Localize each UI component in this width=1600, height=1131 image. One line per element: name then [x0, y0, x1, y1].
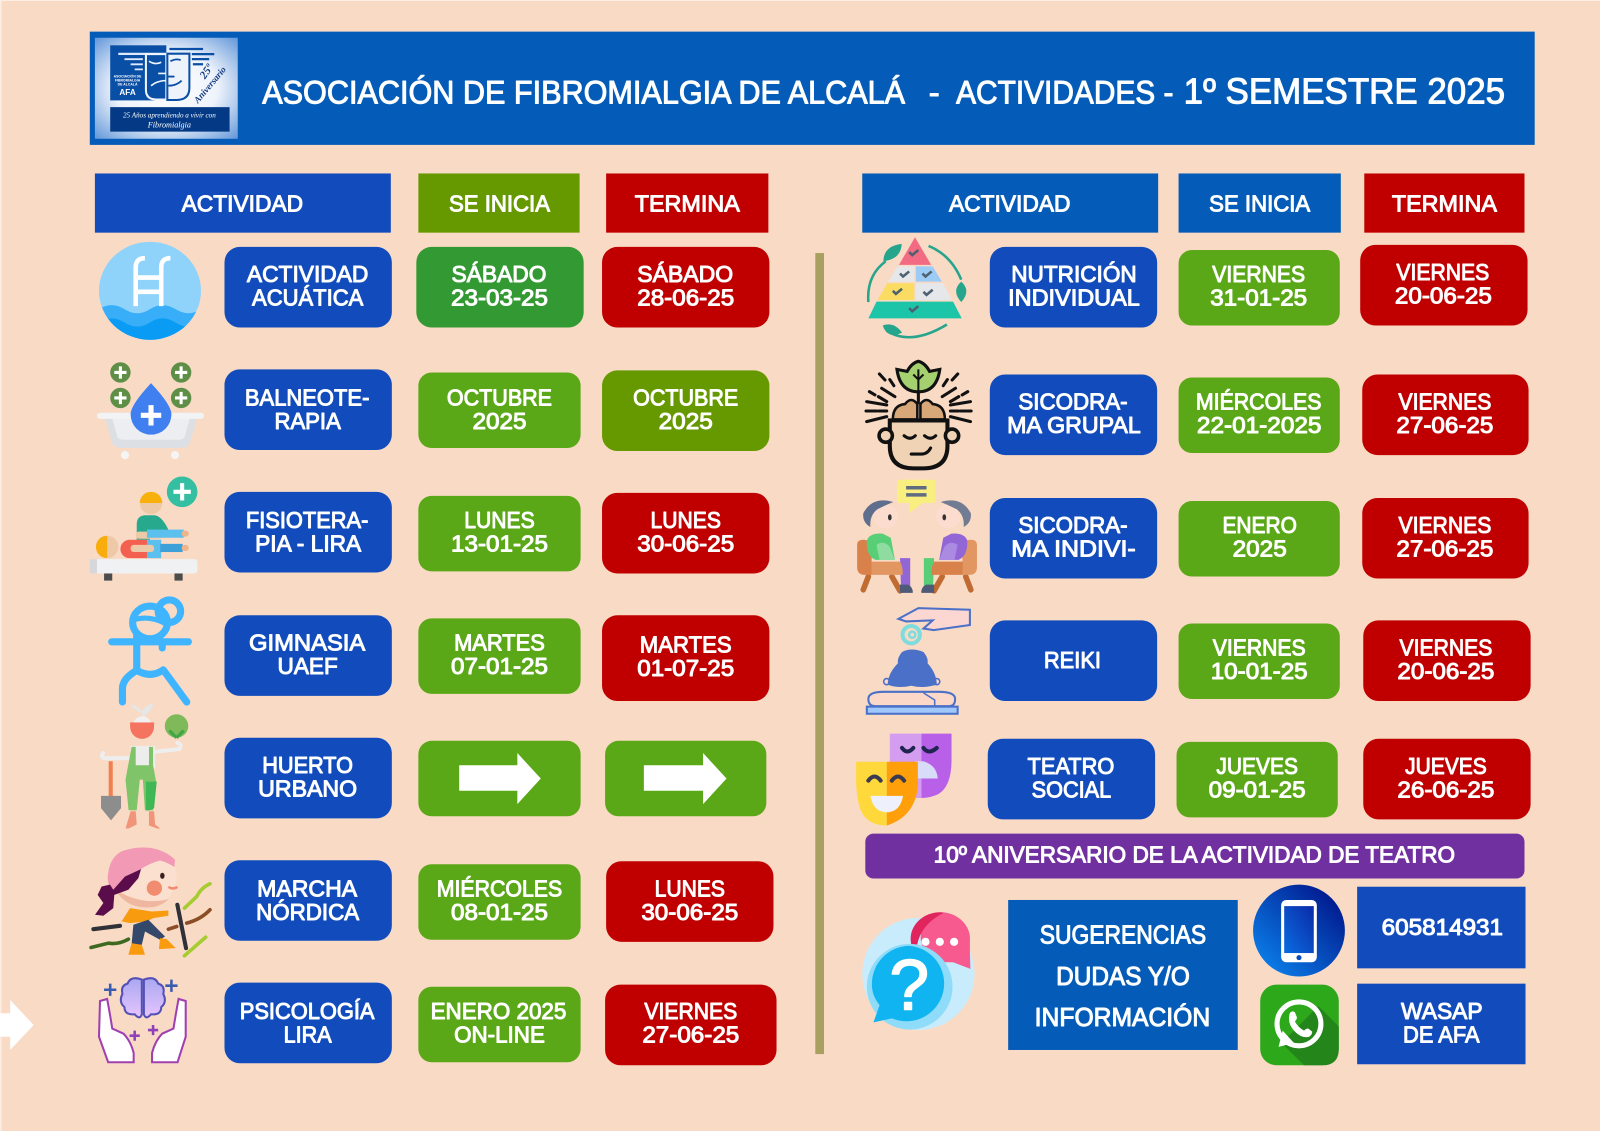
activity: balneoterapia: RAPIA [274, 408, 341, 434]
activity: actividad acuatica [224, 247, 392, 328]
activity: nutricion individual: NUTRICIÓN [1011, 261, 1137, 287]
phone number: 605814931 [1382, 914, 1503, 940]
side arrow [0, 1000, 34, 1050]
phone number [1357, 887, 1526, 968]
start date [418, 864, 581, 940]
activity: teatro social: TEATRO [1028, 753, 1114, 779]
end date: 20-06-25 [1395, 283, 1492, 309]
activity: sicodrama individual [990, 498, 1157, 579]
activity: marcha nordica: NÓRDICA [256, 899, 360, 925]
end date: 27-06-25 [642, 1021, 739, 1047]
end date: VIERNES [1399, 635, 1492, 661]
end date: OCTUBRE [633, 385, 738, 411]
suggestions box: DUDAS Y/O [1056, 963, 1190, 991]
logo: ASOCIACIÓN DE [114, 74, 142, 79]
end date [1362, 374, 1529, 455]
activity: fisioterapia: FISIOTERA- [246, 507, 368, 533]
logo: Aniversario [191, 64, 228, 106]
speech bubble [897, 480, 936, 513]
end date [1362, 498, 1529, 579]
activity: psicologia lira: LIRA [284, 1021, 332, 1047]
title: - [929, 74, 940, 111]
start date [418, 987, 581, 1062]
activity: gimnasia: GIMNASIA [249, 629, 366, 655]
icon: gardener [101, 703, 188, 829]
activity: actividad acuatica: ACTIVIDAD [247, 261, 368, 287]
start date [1179, 623, 1340, 699]
logo: AFA [119, 88, 136, 97]
start date [418, 496, 581, 571]
anniversary banner: 10º ANIVERSARIO DE LA ACTIVIDAD DE TEATRO [934, 842, 1455, 868]
activity: teatro social [988, 739, 1155, 819]
title: ASOCIACIÓN DE FIBROMIALGIA DE ALCALÁ [262, 74, 905, 111]
end date: 27-06-25 [1396, 412, 1493, 438]
logo [95, 38, 238, 139]
start date [1179, 378, 1340, 453]
start date [1179, 501, 1340, 577]
icon: phone [1253, 885, 1345, 977]
end date: 30-06-25 [637, 531, 734, 557]
start date: 07-01-25 [451, 653, 548, 679]
start date: 31-01-25 [1210, 285, 1307, 311]
start date: 09-01-25 [1209, 776, 1306, 802]
end date: SÁBADO [637, 261, 733, 287]
start date: LUNES [464, 507, 535, 533]
activity: reiki: REIKI [1044, 647, 1101, 673]
icon: question bubbles: ? [889, 946, 929, 1026]
end date: VIERNES [1398, 512, 1491, 538]
end date: 30-06-25 [641, 899, 738, 925]
activity: fisioterapia [224, 492, 392, 572]
icon: nordic walker [91, 847, 210, 956]
activity: marcha nordica: MARCHA [257, 875, 357, 901]
activity: sicodrama individual: MA INDIVI- [1011, 536, 1136, 562]
activity: marcha nordica [224, 860, 392, 941]
end date: VIERNES [1396, 259, 1489, 285]
icon: whatsapp [1260, 985, 1339, 1065]
activity: teatro social: SOCIAL [1032, 776, 1111, 802]
end date: 26-06-25 [1397, 776, 1494, 802]
whatsapp label: DE AFA [1403, 1021, 1480, 1047]
end date [1363, 739, 1531, 819]
left person [857, 500, 913, 593]
right table [856, 173, 1531, 1065]
activity: balneoterapia [224, 369, 392, 450]
icon: physiotherapy [90, 477, 197, 581]
activity: actividad acuatica: ACUÁTICA [252, 285, 364, 311]
start date [418, 618, 581, 694]
start date: MARTES [454, 629, 545, 655]
end date [602, 247, 769, 328]
end date: JUEVES [1405, 753, 1487, 779]
activity: huerto urbano [224, 738, 392, 818]
start date: SÁBADO [452, 261, 546, 287]
column header: se inicia: SE INICIA [1209, 191, 1311, 217]
suggestions box: INFORMACIÓN [1035, 1003, 1210, 1032]
activity: balneoterapia: BALNEOTE- [245, 385, 369, 411]
start date: MIÉRCOLES [1196, 389, 1321, 415]
title: ACTIVIDADES - [956, 74, 1173, 111]
column header: actividad [95, 173, 391, 233]
activity: nutricion individual: INDIVIDUAL [1008, 285, 1140, 311]
start date: 10-01-25 [1211, 658, 1308, 684]
start arrow [418, 741, 581, 816]
end date [605, 985, 777, 1065]
start date: VIERNES [1213, 635, 1306, 661]
end arrow [605, 741, 766, 816]
column header: se inicia [418, 173, 580, 233]
end date: 20-06-25 [1397, 658, 1494, 684]
activity: sicodrama grupal [990, 374, 1157, 455]
end date: VIERNES [644, 998, 737, 1024]
end date [1363, 620, 1531, 701]
activity: gimnasia [224, 615, 392, 696]
activity: gimnasia: UAEF [278, 653, 338, 679]
header banner [90, 32, 1535, 145]
end date: 01-07-25 [637, 655, 734, 681]
end date: MARTES [640, 632, 732, 658]
start date: 23-03-25 [451, 285, 548, 311]
left table [90, 173, 777, 1065]
column header: actividad [862, 173, 1158, 233]
column header: actividad: ACTIVIDAD [182, 191, 303, 217]
column header: termina: TERMINA [635, 191, 740, 217]
activity: sicodrama grupal: SICODRA- [1018, 389, 1128, 415]
anniversary banner [865, 834, 1524, 879]
column header: termina [1364, 173, 1524, 233]
start date: 22-01-2025 [1197, 412, 1321, 438]
icon: hands holding brain [99, 978, 186, 1062]
column header: se inicia [1179, 173, 1341, 233]
center divider [815, 253, 824, 1054]
end date [606, 861, 773, 942]
start date: ON-LINE [454, 1021, 545, 1047]
end date: LUNES [651, 507, 721, 533]
logo: Fibromialgia [147, 121, 191, 130]
column header: termina: TERMINA [1392, 191, 1497, 217]
end date: 2025 [659, 408, 713, 434]
icon: mindful head with plant [866, 361, 971, 468]
activity: sicodrama individual: SICODRA- [1018, 512, 1128, 538]
start date: 13-01-25 [451, 531, 548, 557]
activity: reiki [990, 620, 1157, 701]
start date: JUEVES [1216, 753, 1298, 779]
icon: food pyramid [868, 237, 966, 337]
icon: bath with drop [97, 362, 204, 459]
end date: VIERNES [1398, 389, 1491, 415]
activity: fisioterapia: PIA - LIRA [255, 531, 362, 557]
icon: swimming pool [99, 242, 201, 347]
end date [602, 493, 769, 573]
title: 1º SEMESTRE 2025 [1184, 72, 1505, 112]
activity: huerto urbano: HUERTO [262, 752, 353, 778]
whatsapp label: WASAP [1401, 998, 1483, 1024]
right person [921, 500, 977, 593]
end date [1360, 245, 1528, 326]
column header: se inicia: SE INICIA [449, 191, 550, 217]
column header: actividad: ACTIVIDAD [949, 191, 1070, 217]
icon: reiki meditation [867, 608, 970, 714]
start date [418, 372, 581, 448]
logo: FIBROMIALGIA [115, 79, 141, 83]
logo: 25 Años aprendiendo a vivir con [123, 111, 216, 119]
start date: 2025 [472, 408, 527, 434]
activity: psicologia lira: PSICOLOGÍA [240, 998, 375, 1024]
icon: theatre masks [856, 734, 952, 825]
suggestions box: SUGERENCIAS [1040, 921, 1206, 949]
start date: OCTUBRE [447, 385, 552, 411]
start date: VIERNES [1212, 261, 1305, 287]
icon: question bubbles [862, 912, 974, 1030]
start date [416, 247, 584, 328]
activity: nutricion individual [990, 247, 1157, 328]
logo: 25º [197, 62, 216, 82]
end date [602, 615, 769, 701]
start date: 2025 [1233, 536, 1287, 562]
activity: huerto urbano: URBANO [258, 775, 357, 801]
start date: 08-01-25 [451, 899, 548, 925]
start date: ENERO [1222, 512, 1297, 538]
end date: LUNES [655, 875, 725, 901]
icon: gymnastics figure [112, 600, 188, 702]
logo: DE ALCALÁ [118, 82, 138, 87]
activity: psicologia lira [224, 983, 392, 1063]
start date: ENERO 2025 [431, 998, 566, 1024]
title [262, 72, 1505, 112]
activity: sicodrama grupal: MA GRUPAL [1007, 412, 1141, 438]
end date: 27-06-25 [1396, 536, 1493, 562]
end date: 28-06-25 [637, 285, 734, 311]
start date [1179, 250, 1340, 326]
suggestions box [1008, 900, 1238, 1050]
end date [602, 370, 769, 451]
start date: MIÉRCOLES [437, 875, 562, 901]
whatsapp label [1357, 984, 1526, 1064]
icon: two people talking [857, 480, 977, 593]
start date [1177, 742, 1338, 817]
column header: termina [606, 173, 768, 233]
